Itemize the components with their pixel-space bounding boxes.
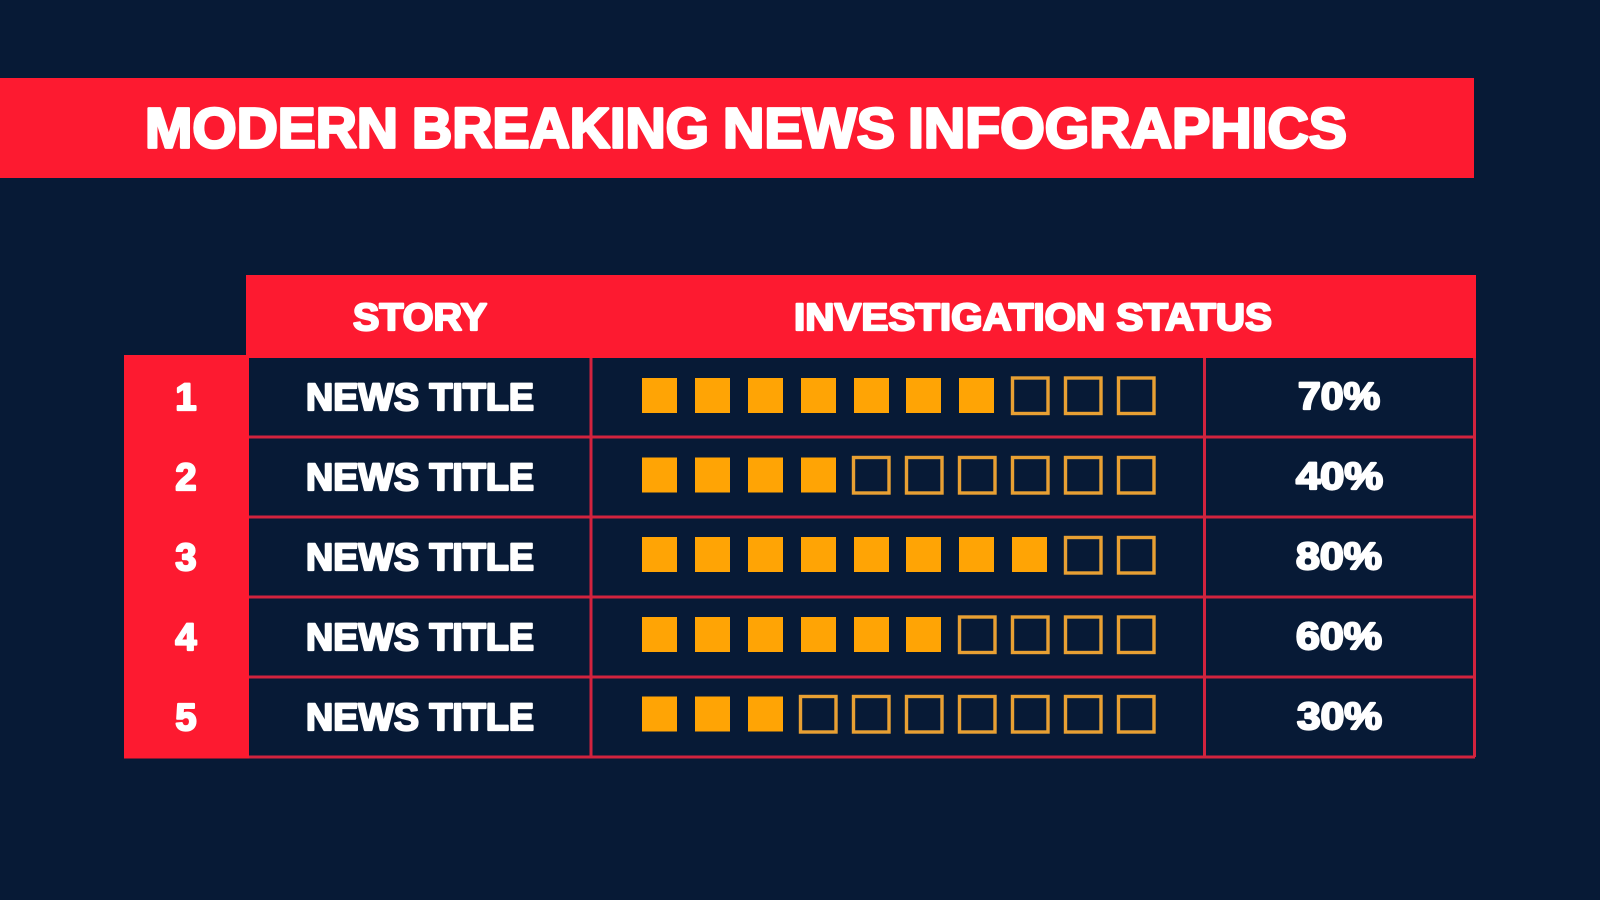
percent 60: 60% (1296, 616, 1382, 658)
title: BREAKING (412, 96, 709, 160)
rank 2: 2 (175, 457, 197, 499)
title banner (0, 78, 1474, 178)
percent 70: 70% (1298, 376, 1380, 418)
table (124, 275, 1476, 758)
status row 3: 80% (642, 537, 1154, 573)
title: INFOGRAPHICS (908, 96, 1347, 160)
rank column (124, 355, 249, 758)
rank 5: 5 (175, 697, 197, 739)
rank 4: 4 (175, 617, 197, 659)
percent 40: 40% (1296, 456, 1383, 498)
status row 1: 70% (642, 378, 1154, 414)
status row 5: 30% (642, 696, 1154, 732)
heading: investigation status: INVESTIGATION STATUS (794, 297, 1272, 339)
story titles (306, 377, 534, 739)
news title 3: NEWS TITLE (306, 537, 534, 579)
news title 1: NEWS TITLE (306, 377, 534, 419)
percentages (1296, 376, 1383, 738)
status row 4: 60% (642, 617, 1154, 652)
rank 1: 1 (175, 377, 197, 419)
percent 30: 30% (1297, 696, 1382, 738)
status row 2: 40% (642, 458, 1154, 493)
heading: story: STORY (353, 297, 487, 339)
grid lines (249, 358, 1475, 757)
rank 3: 3 (175, 537, 197, 579)
news title 5: NEWS TITLE (306, 697, 534, 739)
news title 4: NEWS TITLE (306, 617, 534, 659)
title: MODERN (145, 96, 398, 160)
percent 80: 80% (1296, 536, 1382, 578)
news title 2: NEWS TITLE (306, 457, 534, 499)
table header (246, 275, 1476, 358)
title: NEWS (723, 96, 895, 160)
